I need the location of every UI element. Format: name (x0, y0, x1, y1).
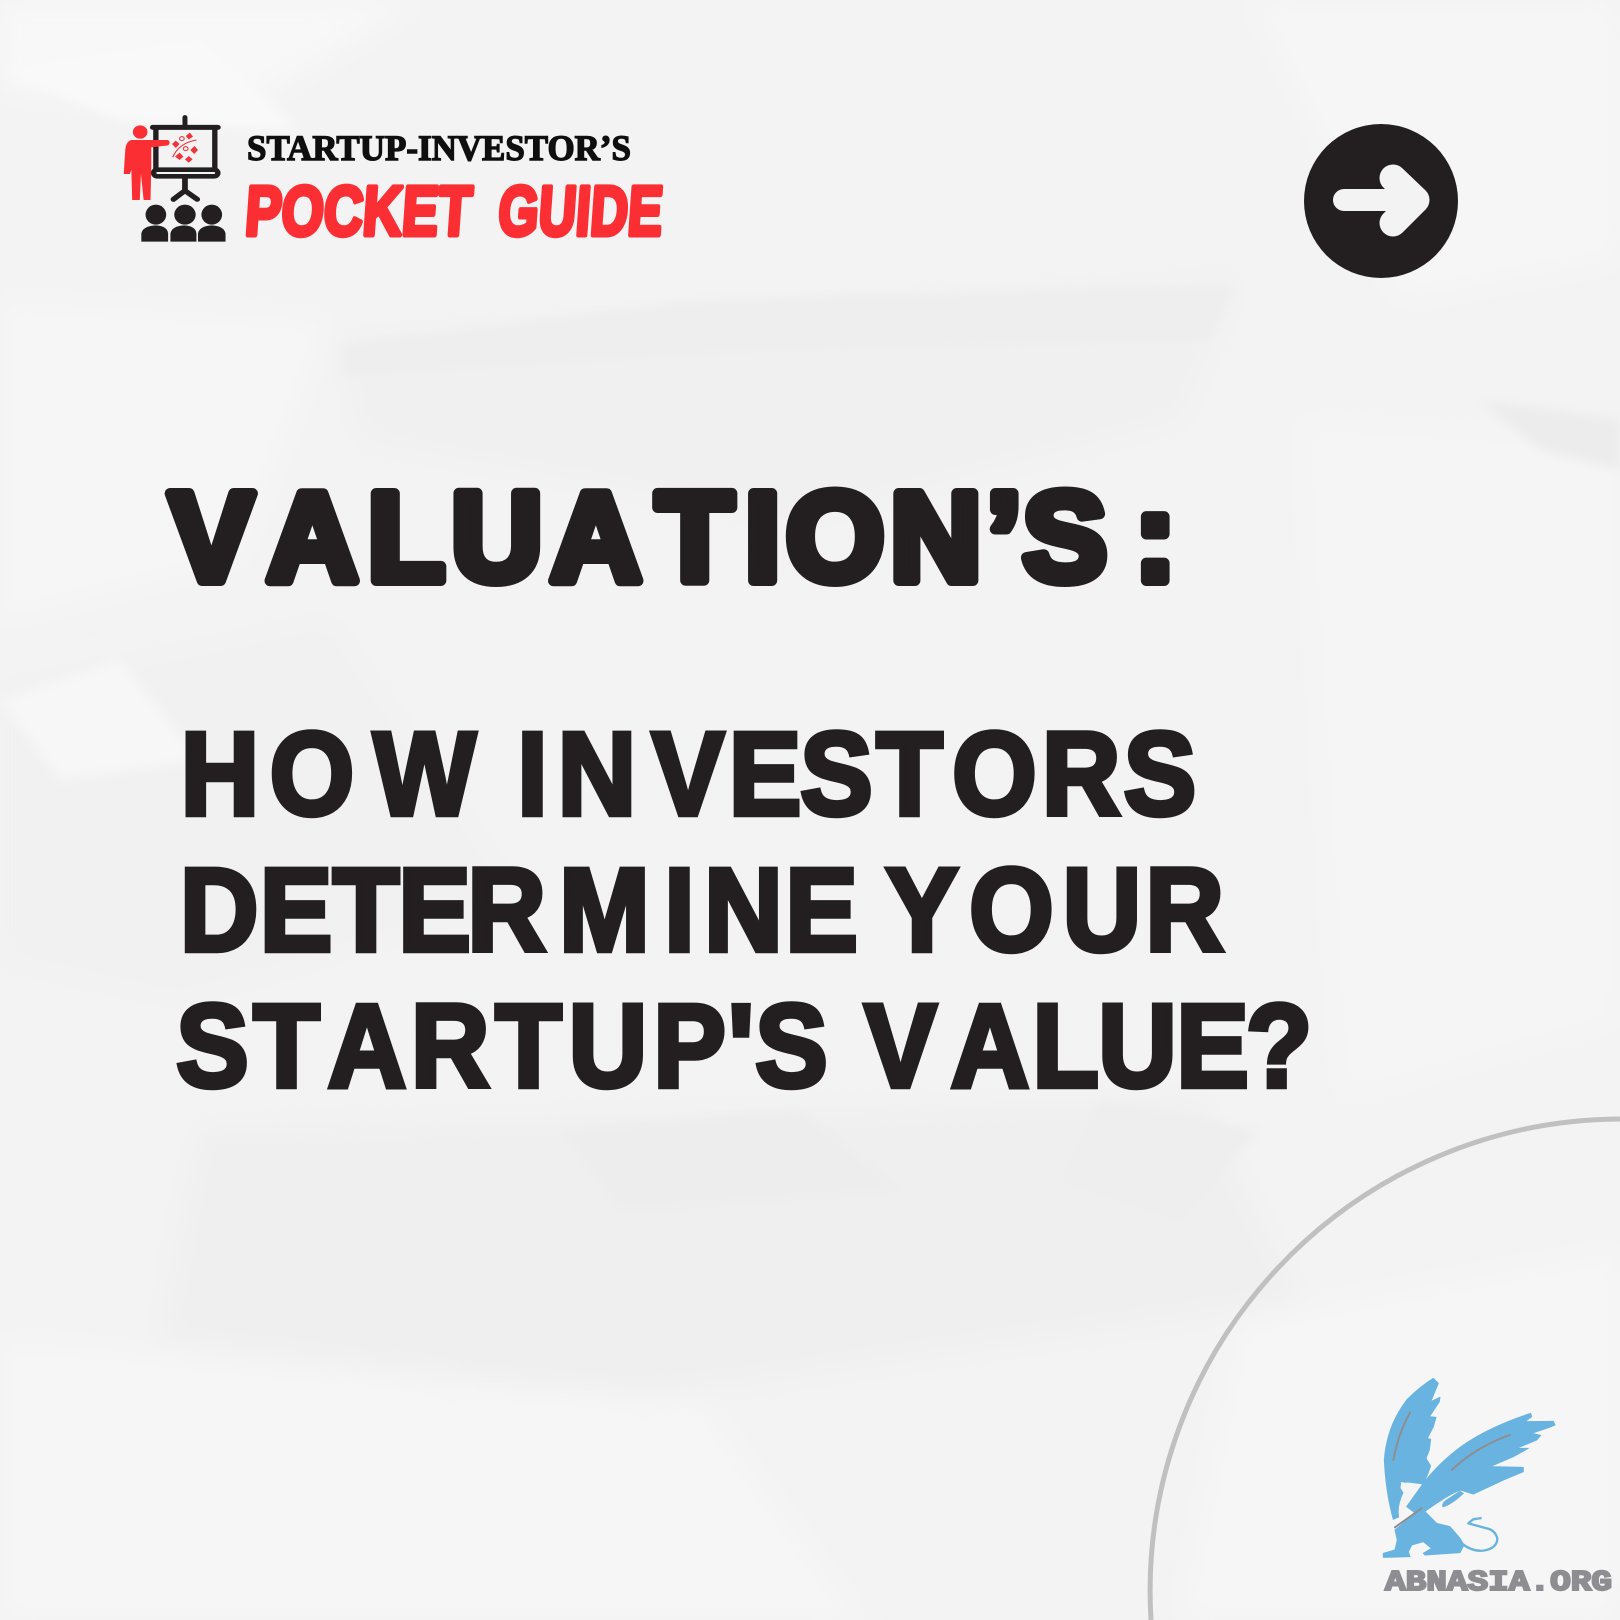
decorative arc (1150, 1119, 1620, 1620)
griffin head (1399, 1482, 1421, 1518)
subtitle line 1: HOW INVESTORS (181, 708, 1196, 841)
subtitle line 3: STARTUP'S VALUE? (176, 980, 1312, 1113)
griffin left wing (1384, 1378, 1440, 1519)
logo wordmark: ABNASIA.ORG (1385, 1566, 1612, 1599)
chart marks on board (172, 133, 198, 163)
title: VALUATION’S : (169, 466, 1176, 608)
subtitle line 2: DETERMINE YOUR (180, 844, 1224, 977)
griffin feather (1442, 1491, 1464, 1507)
audience (141, 205, 226, 242)
presentation board (153, 117, 218, 199)
logo line 1: STARTUP-INVESTOR’S (247, 128, 631, 168)
icon: next arrow button (1304, 124, 1458, 278)
word: guide: GUIDE (496, 172, 665, 250)
griffin right wing (1407, 1413, 1555, 1517)
logo: griffin and ABNASIA.ORG (1383, 1378, 1612, 1599)
griffin tail (1462, 1518, 1497, 1551)
word: pocket: POCKET (243, 172, 475, 250)
presenter figure (124, 125, 170, 200)
icon: presenter with board and audience (124, 117, 226, 242)
logo line 2 (243, 172, 665, 250)
subtitle (176, 708, 1312, 1113)
griffin body (1383, 1508, 1464, 1557)
logo: Startup-Investor's Pocket Guide (124, 117, 665, 250)
icon: griffin (1383, 1378, 1555, 1557)
